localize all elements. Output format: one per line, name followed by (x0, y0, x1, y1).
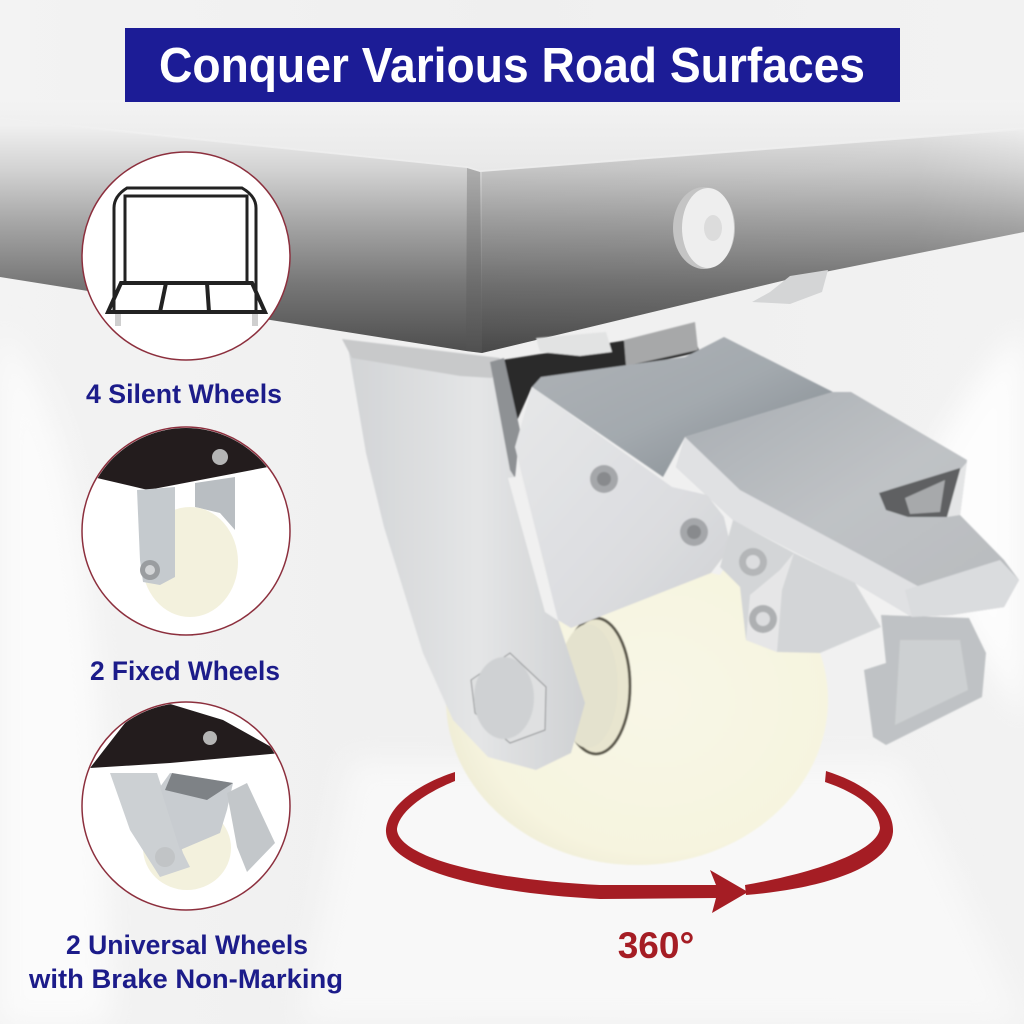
brake pedal (676, 392, 1019, 617)
rotation arrow (386, 771, 893, 913)
icon: rack cart (108, 188, 265, 326)
caption: fixed wheels: 2 Fixed Wheels (90, 656, 280, 686)
panel: universal wheels (82, 702, 290, 910)
title banner (125, 28, 900, 102)
panel: fixed wheels (82, 425, 290, 635)
caption: 4 silent wheels: 4 Silent Wheels (86, 379, 282, 409)
caption: universal wheels: 2 Universal Wheels (66, 930, 308, 960)
wheel (446, 535, 828, 865)
label: 360 degrees: 360° (618, 925, 694, 966)
swivel hub and gap (502, 322, 700, 425)
bracket under frame (752, 270, 828, 304)
table top frame (0, 100, 1024, 353)
caption: universal wheels (28, 930, 343, 994)
icon: bolt on frame (673, 187, 735, 269)
wheel washer (558, 618, 630, 754)
fork leg (342, 339, 585, 770)
axle bolt (471, 653, 546, 743)
brake lower bracket (720, 520, 881, 653)
brake housing (515, 337, 833, 628)
panel: 4 silent wheels (82, 152, 290, 360)
title banner: Conquer Various Road Surfaces (159, 39, 865, 93)
swivel caster illustration (342, 322, 1019, 865)
brake foot tab (864, 615, 986, 745)
caption: universal wheels: with Brake Non-Marking (28, 964, 343, 994)
rivets (590, 465, 708, 546)
